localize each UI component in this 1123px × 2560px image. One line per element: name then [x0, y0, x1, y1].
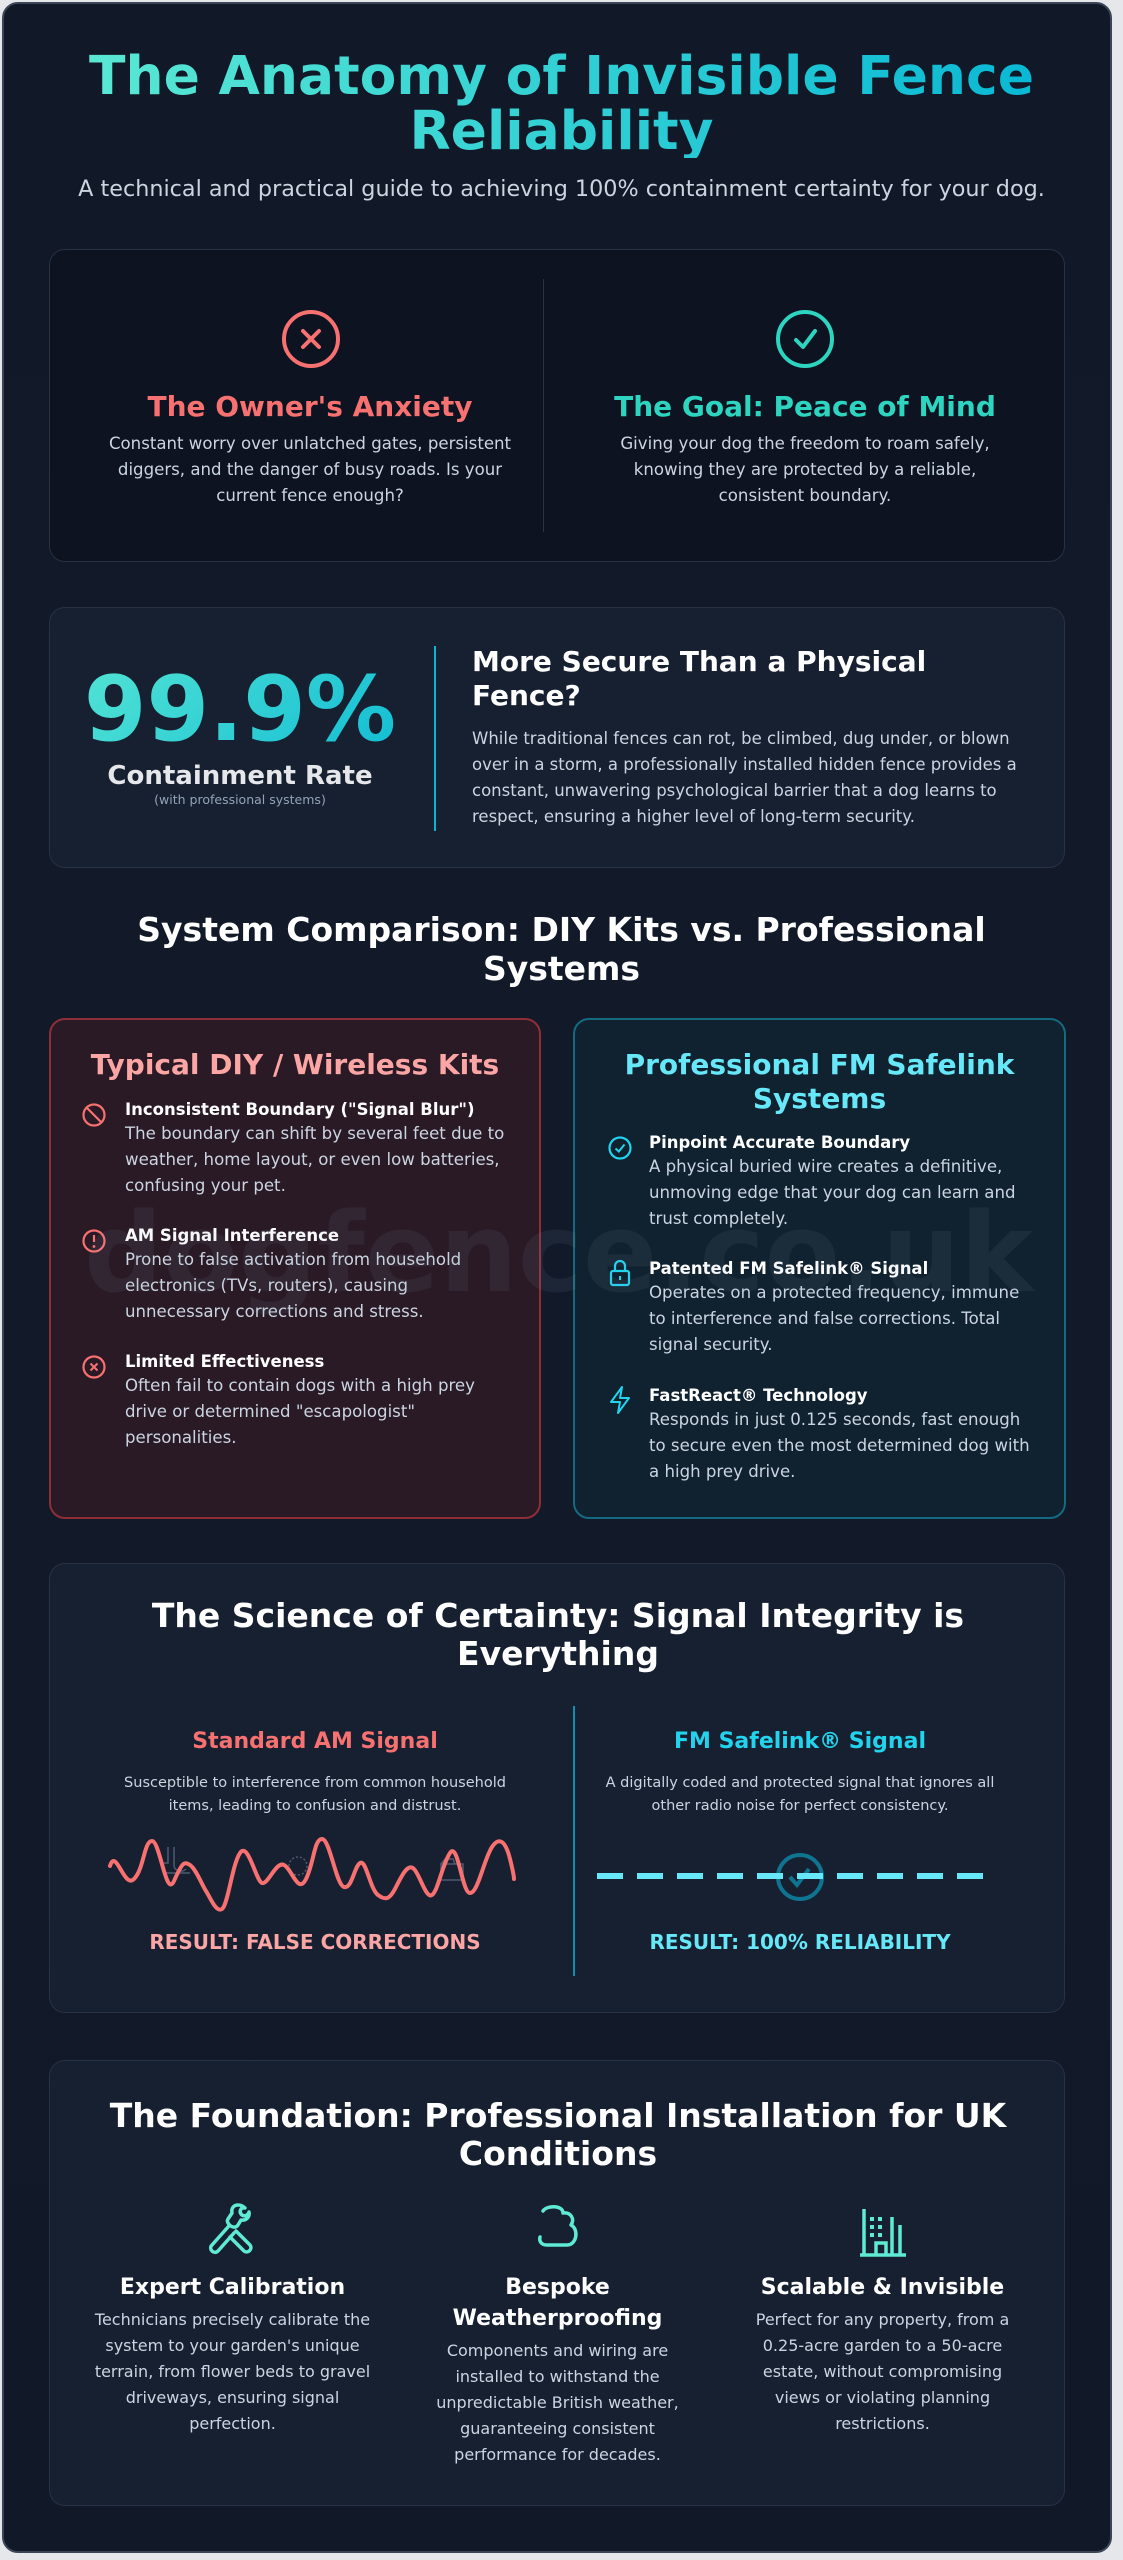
item: fastreact: FastReact® Technology	[649, 1386, 868, 1405]
icon: teal check	[776, 310, 834, 368]
text: goal: Giving your dog the freedom to roam safely, knowing they are protected by a reliable, consistent boundary.	[620, 434, 990, 505]
heading: The Science of Certainty: Signal Integrity is Everything	[152, 1596, 964, 1673]
heading: anxiety: The Owner's Anxiety	[147, 390, 473, 423]
stat number: 99.9%	[84, 657, 396, 762]
column: scalable	[756, 2209, 1009, 2433]
text: anxiety: Constant worry over unlatched gates, persistent diggers, and the danger of busy roads. Is your current fence enough?	[109, 434, 511, 505]
chart: noisy wave	[108, 1837, 516, 1912]
paragraph: While traditional fences can rot, be climbed, dug under, or blown over in a storm, a professionally installed hidden fence provides a constant, unwavering psychological barrier that a dog learns to respect, ensuring a higher level of long-term security.	[472, 729, 1017, 826]
column: AM signal: RESULT: FALSE CORRECTIONS	[149, 1930, 481, 1954]
heading: Professional FM Safelink Systems	[625, 1048, 1014, 1115]
column: scalable: Scalable & Invisible	[761, 2275, 1004, 2300]
item: AM interference: Prone to false activation from household electronics (TVs, routers), causing unnecessary corrections and stress.	[125, 1250, 461, 1321]
column: scalable: Perfect for any property, from a 0.25-acre garden to a 50-acre estate, without compromising views or violating planning restrictions.	[756, 2310, 1009, 2433]
chart: steady dashed signal	[597, 1853, 983, 1901]
panel: signal science	[49, 1563, 1065, 2013]
item: fastreact	[610, 1386, 1030, 1481]
panel: foundation	[49, 2060, 1065, 2506]
panel: anxiety vs goal	[49, 249, 1065, 562]
item: limited effectiveness: Limited Effectiveness	[125, 1352, 324, 1371]
heading: goal: The Goal: Peace of Mind	[614, 390, 996, 423]
column: weatherproofing: Components and wiring are installed to withstand the unpredictable British weather, guaranteeing consistent performance for decades.	[436, 2341, 679, 2464]
item: inconsistent boundary: The boundary can shift by several feet due to weather, home layout, or even low batteries, confusing your pet.	[125, 1124, 504, 1195]
item: patented signal: Operates on a protected frequency, immune to interference and false corrections. Total signal security.	[649, 1283, 1019, 1354]
divider	[543, 279, 544, 532]
item: inconsistent boundary	[82, 1100, 504, 1195]
column: AM signal: Susceptible to interference from common household items, leading to confusion and distrust.	[124, 1775, 506, 1814]
watermark: dogfence.co.uk	[84, 1189, 1033, 1317]
stat note: (with professional systems)	[154, 792, 326, 807]
panel: stat	[49, 607, 1065, 868]
column: FM signal: A digitally coded and protected signal that ignores all other radio noise for perfect consistency.	[606, 1775, 994, 1814]
title: The Anatomy of Invisible Fence	[89, 44, 1034, 107]
column: AM signal: Standard AM Signal	[192, 1729, 438, 1754]
stat number	[10, 658, 470, 762]
item: patented signal: Patented FM Safelink® Signal	[649, 1259, 928, 1278]
item: pinpoint: Pinpoint Accurate Boundary	[649, 1133, 910, 1152]
item: limited effectiveness	[82, 1352, 475, 1447]
divider	[573, 1706, 575, 1976]
item: pinpoint	[608, 1133, 1016, 1228]
title	[40, 48, 1083, 158]
column: FM signal	[597, 1729, 994, 1954]
column: weatherproofing: Bespoke Weatherproofing	[453, 2275, 662, 2331]
item: limited effectiveness: Often fail to contain dogs with a high prey drive or determined "escapologist" personalities.	[125, 1376, 475, 1447]
column: FM signal: FM Safelink® Signal	[674, 1729, 926, 1754]
column: expert calibration: Technicians precisely calibrate the system to your garden's unique terrain, from flower beds to gravel driveways, ensuring signal perfection.	[95, 2310, 370, 2433]
column: expert calibration	[94, 2203, 370, 2433]
panel: professional systems	[573, 1018, 1066, 1519]
icon: red x	[282, 310, 340, 368]
heading: The Foundation: Professional Installation for UK Conditions	[110, 2096, 1006, 2173]
column: FM signal: RESULT: 100% RELIABILITY	[649, 1930, 951, 1954]
heading: system comparison: System Comparison: DIY Kits vs. Professional Systems	[137, 910, 986, 988]
column: expert calibration: Expert Calibration	[120, 2275, 345, 2300]
item: AM interference: AM Signal Interference	[125, 1226, 339, 1245]
item: pinpoint: A physical buried wire creates a definitive, unmoving edge that your dog can learn and trust completely.	[649, 1157, 1016, 1228]
heading: Typical DIY / Wireless Kits	[91, 1048, 499, 1081]
stat label: Containment Rate	[107, 761, 373, 791]
panel: DIY kits	[49, 1018, 541, 1519]
column: AM signal	[108, 1729, 516, 1954]
subtitle: A technical and practical guide to achieving 100% containment certainty for your dog.	[78, 176, 1045, 202]
column: weatherproofing	[436, 2205, 679, 2464]
title: Reliability	[409, 99, 714, 162]
item: AM interference	[82, 1226, 461, 1321]
item: fastreact: Responds in just 0.125 seconds, fast enough to secure even the most determined dog with a high prey drive.	[649, 1410, 1030, 1481]
item: inconsistent boundary: Inconsistent Boundary ("Signal Blur")	[125, 1100, 475, 1119]
divider	[434, 646, 436, 831]
item: patented signal	[610, 1259, 1019, 1354]
heading: more secure: More Secure Than a Physical Fence?	[472, 645, 926, 712]
